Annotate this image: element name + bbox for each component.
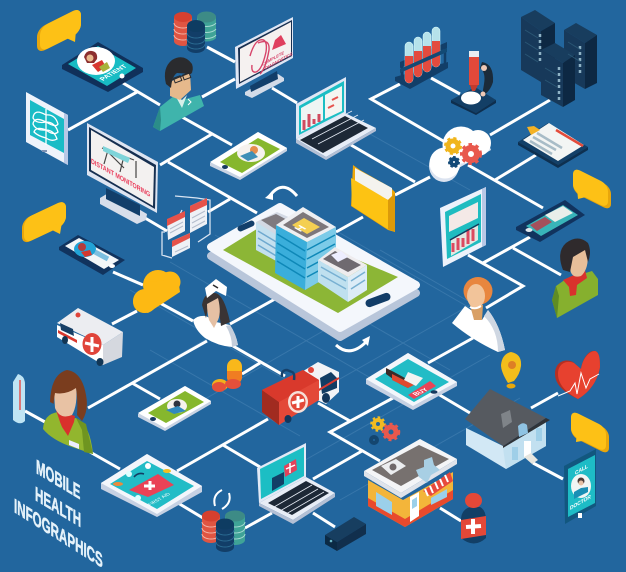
- gear: navy: [449, 157, 459, 167]
- gear: yellow: [372, 418, 384, 430]
- phone: green: [138, 386, 211, 431]
- label: patient: PATIENT: [99, 64, 130, 82]
- tablet: first aid: [101, 454, 202, 517]
- calendar: left: [167, 211, 185, 240]
- person: right woman: [552, 238, 598, 318]
- phone: call doctor: [564, 449, 596, 524]
- speech bubble: left: [22, 199, 66, 245]
- phone: chart: [516, 200, 585, 242]
- gear: red: [383, 424, 399, 440]
- laptop: bottom: [257, 443, 335, 524]
- test tubes rack: [395, 27, 448, 89]
- calendars: [162, 196, 210, 258]
- arrow: curved bottom: [336, 336, 370, 351]
- database: top: [174, 12, 216, 53]
- gear: navy: [371, 437, 377, 443]
- building: right block: [318, 247, 367, 302]
- phone: doctor: [210, 132, 287, 180]
- clipboard: [518, 123, 588, 168]
- person: headset: [452, 277, 505, 352]
- title: [14, 456, 103, 572]
- medicine bottle: [461, 493, 486, 544]
- tablet: patient: [62, 42, 143, 92]
- person: doctor: [153, 57, 204, 131]
- server racks: [521, 10, 597, 107]
- tablet: analytics: [440, 187, 486, 267]
- label: call: CALL: [575, 463, 588, 477]
- thermometer: [13, 374, 25, 423]
- speech bubble: right upper: [573, 167, 611, 211]
- calendar: right: [190, 198, 207, 233]
- house: [465, 389, 550, 469]
- pills: [212, 359, 242, 392]
- label: distant monitoring: DISTANT MONITORING: [91, 158, 151, 199]
- monitor: complete diagnostics: [235, 17, 293, 98]
- map pin: [501, 352, 521, 388]
- folder: [351, 165, 395, 232]
- tablet: buy: [366, 353, 457, 410]
- tablet: x-ray: [26, 92, 68, 165]
- label: doctor: DOCTOR: [570, 494, 591, 512]
- connector lines: [25, 47, 563, 528]
- building: main block: [275, 207, 336, 290]
- person: woman left: [43, 370, 93, 454]
- heart: [555, 351, 600, 399]
- monitor: distant monitoring: [87, 123, 158, 224]
- phone: left: [59, 235, 125, 275]
- speech bubble: right lower: [571, 410, 609, 455]
- first aid kit and ambulance: [262, 362, 339, 425]
- cloud with gears: [429, 126, 491, 182]
- ambulance: [57, 308, 123, 366]
- label: first aid: FIRST AID: [147, 492, 173, 507]
- speech bubble: top left: [37, 7, 81, 54]
- laptop: top: [296, 77, 376, 160]
- smartphone with hospital: [211, 207, 416, 337]
- gear: yellow: [446, 138, 460, 154]
- microscope: [451, 51, 496, 115]
- monitor: complete diagnostics: DIAGNOSTICS: [265, 51, 292, 71]
- cloud: yellow: [133, 270, 180, 313]
- person: nurse: [193, 279, 238, 347]
- store: [364, 439, 457, 527]
- calendar: bottom: [172, 233, 190, 257]
- building: left block: [256, 212, 300, 262]
- label: buy: BUY: [412, 387, 431, 397]
- arrow: curved top: [265, 187, 297, 200]
- router: [325, 517, 366, 551]
- gears: [371, 418, 399, 443]
- gear: red: [462, 144, 480, 164]
- kit body: [262, 370, 319, 425]
- database: bottom: [202, 510, 245, 552]
- label: complete diagnostics: COMPLETE: [262, 50, 284, 67]
- label: helipad H: H: [292, 224, 310, 234]
- title line: health: HEALTH: [35, 483, 81, 533]
- sync arrows: [214, 490, 230, 509]
- title line: mobile: MOBILE: [36, 456, 80, 504]
